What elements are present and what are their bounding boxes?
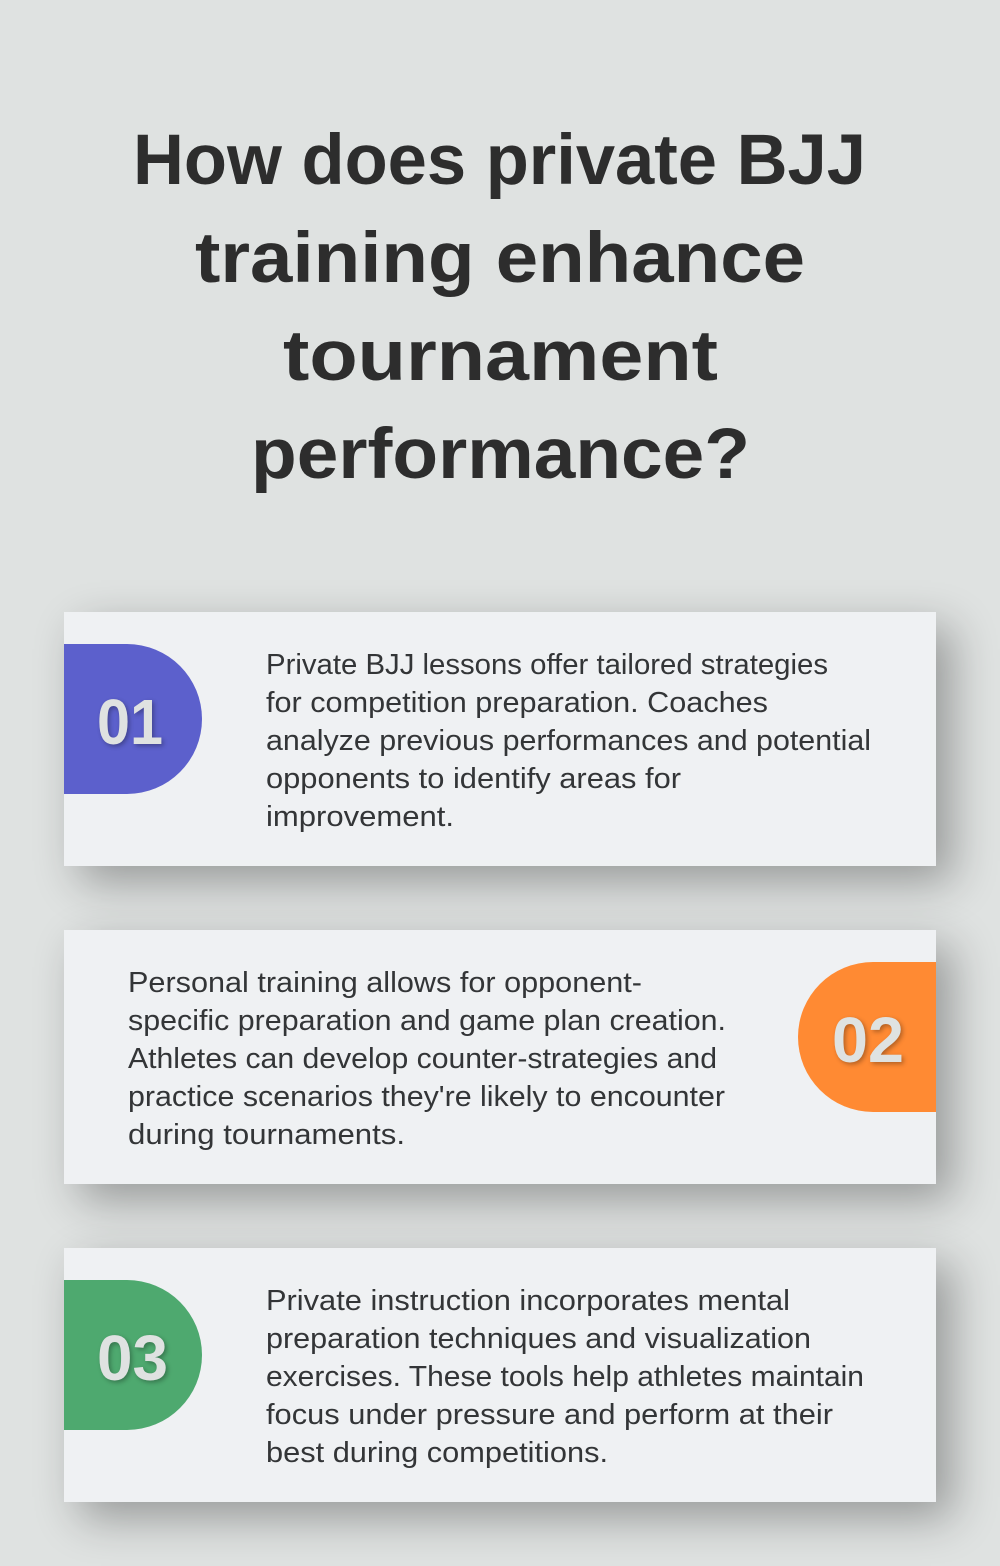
text block: step 02 description: Personal training allows for opponent- — [128, 967, 642, 999]
text block: step 02 description: specific preparation and game plan creation. — [128, 1005, 726, 1037]
panel: step 02 — [64, 930, 936, 1184]
badge: 03: 03 — [97, 1322, 168, 1394]
text block: step 02 description: Athletes can develop counter-strategies and — [128, 1043, 717, 1075]
text block: step 03 description: preparation techniques and visualization — [266, 1323, 811, 1355]
title — [133, 121, 866, 494]
badge: 02: 02 — [832, 1004, 904, 1076]
text block: step 03 description: exercises. These tools help athletes maintain — [266, 1361, 864, 1393]
panel: step 01 — [64, 612, 936, 866]
title: How does private BJJ — [133, 121, 866, 200]
text block: step 01 description: analyze previous performances and potential — [266, 725, 871, 757]
text block: step 01 description: Private BJJ lessons offer tailored strategies — [266, 649, 828, 681]
text block: step 01 description: opponents to identify areas for — [266, 763, 681, 795]
text block: step 01 description — [266, 649, 871, 833]
text block: step 01 description: for competition preparation. Coaches — [266, 687, 768, 719]
badge: 01 — [64, 644, 202, 794]
badge: 03 — [64, 1280, 202, 1430]
text block: step 03 description: focus under pressure and perform at their — [266, 1399, 833, 1431]
badge: 02 — [798, 962, 936, 1112]
badge: 01: 01 — [97, 686, 163, 758]
title: training enhance — [195, 219, 805, 298]
title: tournament — [283, 317, 718, 396]
text block: step 02 description: during tournaments. — [128, 1119, 405, 1151]
text block: step 03 description: Private instruction incorporates mental — [266, 1285, 790, 1317]
text block: step 03 description: best during competitions. — [266, 1437, 608, 1469]
text block: step 01 description: improvement. — [266, 801, 454, 833]
panel: step 03 — [64, 1248, 936, 1502]
text block: step 02 description — [128, 967, 726, 1151]
title: performance? — [251, 415, 750, 494]
text block: step 03 description — [266, 1285, 864, 1469]
text block: step 02 description: practice scenarios they're likely to encounter — [128, 1081, 725, 1113]
